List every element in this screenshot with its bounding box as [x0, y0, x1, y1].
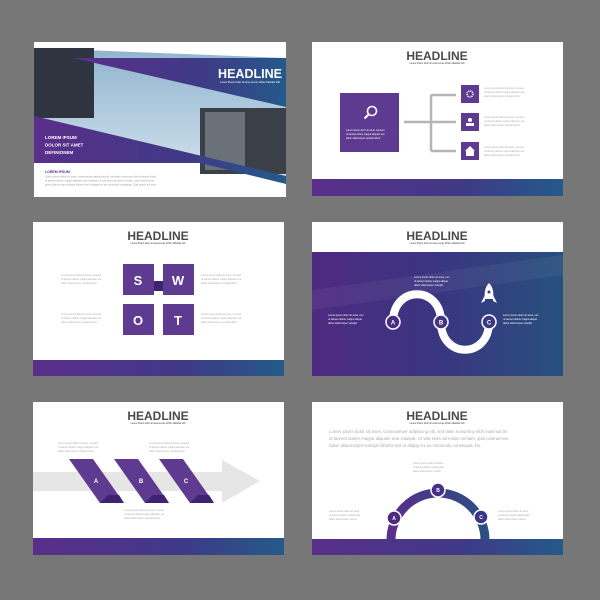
swot texts: tation ullamcorper suscipit lobort [61, 282, 97, 285]
banner: headline: HEADLINE [218, 67, 282, 81]
swot grid: O [133, 313, 143, 328]
swot texts [61, 274, 242, 324]
side texts: Lorem ipsum dolor sit amet, consect [484, 146, 524, 149]
swot texts: tation ullamcorper suscipit lobort [201, 321, 237, 324]
headline: HEADLINE [406, 409, 468, 423]
headline: HEADLINE [406, 49, 468, 63]
side texts: ut laoreet dolore magna aliquam era [484, 120, 525, 123]
body text: Lorem ipsum dolor sit amet, consectetuer adipiscing elit, sed diam nonummy nibh euismod tincid [45, 174, 156, 178]
banner: headline [73, 58, 286, 107]
paragraph: tation ullamcorper suscipit lobortis nisl ut aliquip ex ea commodo consequat. Du [329, 443, 481, 448]
slide 2: hierarchy [312, 42, 563, 196]
headline: Lorem iPsum dolor sit ama sed ac uPtion fabellas Vidi [410, 62, 465, 65]
texts: tation ullamcorper suscip [498, 518, 526, 521]
photo [34, 48, 286, 182]
side texts: ut laoreet dolore magna aliquam era [484, 150, 525, 153]
ribbons: C [184, 479, 189, 485]
slide 6: arc timeline [312, 402, 563, 555]
banner: lorem ipsum [34, 116, 286, 184]
swot texts: tation ullamcorper suscipit lobort [201, 282, 237, 285]
curve with markers: C [487, 320, 492, 326]
headline: HEADLINE [406, 229, 468, 243]
texts: Lorem ipsum dolor sit amet, consect [58, 442, 98, 445]
headline: Lorem iPsum dolor sit ama sed ac uPtion fabellas Vidi [410, 422, 465, 425]
slide 3: SWOT [33, 222, 284, 376]
texts: ut laoreet dolore magna aliq [413, 466, 445, 469]
arc [387, 483, 488, 540]
swot texts: Lorem ipsum dolor sit amet, consect [61, 313, 101, 316]
body text: tation ullamcorper suscipit lobortis nisl ut aliquip ex ea commodo consequat. Duis autem vel eum [45, 182, 156, 186]
slide 4: S-curve roadmap [312, 222, 563, 376]
paragraph: Lorem ipsum dolor sit amet, consectetuer adipiscing elit, sed diam nonummy nibh euismod tin [329, 429, 508, 434]
paragraph: ut laoreet dolore magna aliquam erat volutpat. Ut wisi enim ad minim veniam, quis nostrud exe [329, 436, 509, 441]
slide 5: ribbon arrow [33, 402, 284, 555]
texts [329, 462, 530, 521]
swot texts: Lorem ipsum dolor sit amet, consect [201, 274, 241, 277]
swot grid: S [134, 273, 143, 288]
headline: HEADLINE [127, 409, 189, 423]
paragraph [329, 429, 509, 448]
icon boxes [461, 85, 479, 160]
main box with magnifier [340, 93, 399, 152]
texts: Lorem ipsum dolor sit amet, [413, 462, 444, 465]
ribbons: A [94, 479, 99, 485]
slide 1: cover [34, 42, 286, 197]
texts: tation ullamcorper suscip [413, 470, 441, 473]
arc: B [436, 488, 440, 494]
curve with markers [386, 294, 496, 350]
side texts: tation ullamcorper suscipit lobort [484, 124, 520, 127]
curve with markers: A [391, 320, 396, 326]
texts: tation ullamcorper suscipit [414, 284, 443, 287]
banner: lorem ipsum: LOREM IPSUM [45, 135, 77, 140]
texts: tation ullamcorper suscip [329, 518, 357, 521]
swot texts: ut laoreet dolore magna aliquam era [201, 317, 242, 320]
connector [404, 95, 456, 151]
headline: Lorem iPsum dolor sit ama sed ac uPtion fabellas Vidi [131, 242, 186, 245]
banner: lorem ipsum: DEFINIONEM [45, 150, 74, 155]
headline: HEADLINE [127, 229, 189, 243]
swot texts: Lorem ipsum dolor sit amet, consect [201, 313, 241, 316]
texts: Lorem ipsum dolor sit amet, consect [124, 509, 164, 512]
swot texts: Lorem ipsum dolor sit amet, consect [61, 274, 101, 277]
swot texts: tation ullamcorper suscipit lobort [61, 321, 97, 324]
curve with markers: B [439, 320, 444, 326]
swot texts: ut laoreet dolore magna aliquam era [61, 317, 102, 320]
ribbons: B [139, 479, 144, 485]
headline: Lorem iPsum dolor sit ama sed ac uPtion fabellas Vidi [410, 242, 465, 245]
texts: tation ullamcorper suscipit lobort [124, 517, 160, 520]
body text: LOREM IPSUM [45, 170, 70, 174]
side texts: Lorem ipsum dolor sit amet, consect [484, 116, 524, 119]
main box with magnifier: Lorem ipsum dolor sit amet, consect [346, 129, 385, 132]
texts: ut laoreet dolore magna aliquam era [149, 446, 190, 449]
banner: headline: Lorem iPsum dolor sit ama sed ac uPtion fabellas Vidi [220, 81, 280, 84]
texts: ut laoreet dolore magna aliquam era [124, 513, 165, 516]
icon: rocket [481, 283, 497, 303]
side texts [484, 87, 525, 157]
texts: ut laoreet dolore magna aliqua [503, 318, 537, 321]
texts: ut laoreet dolore magna aliqua [414, 280, 448, 283]
texts: tation ullamcorper suscipit [503, 322, 532, 325]
texts: tation ullamcorper suscipit lobort [58, 450, 94, 453]
texts: Lorem ipsum dolor sit amet, consect [149, 442, 189, 445]
texts: Lorem ipsum dolor sit amet, con [328, 314, 364, 317]
arc: C [479, 515, 483, 521]
side texts: tation ullamcorper suscipit lobort [484, 154, 520, 157]
headline: Lorem iPsum dolor sit ama sed ac uPtion fabellas Vidi [131, 422, 186, 425]
texts: ut laoreet dolore magna aliq [498, 514, 530, 517]
texts: Lorem ipsum dolor sit amet, con [414, 276, 450, 279]
texts: ut laoreet dolore magna aliqua [328, 318, 362, 321]
texts: ut laoreet dolore magna aliquam era [58, 446, 99, 449]
main box with magnifier: ut laoreet dolore magna aliquam era [346, 133, 385, 136]
side texts: tation ullamcorper suscipit lobort [484, 95, 520, 98]
body text: ut laoreet dolore magna aliquam erat volutpat. Ut wisi enim ad minim veniam, quis nostrud exer [45, 178, 154, 182]
texts: Lorem ipsum dolor sit amet, con [503, 314, 539, 317]
texts: Lorem ipsum dolor sit amet, [329, 510, 360, 513]
ribbons [69, 459, 214, 503]
swot grid: W [172, 273, 185, 288]
texts: tation ullamcorper suscipit lobort [149, 450, 185, 453]
main box with magnifier: tation ullamcorper suscipit lobort [346, 137, 381, 140]
swot texts: ut laoreet dolore magna aliquam era [201, 278, 242, 281]
texts [328, 276, 539, 325]
arc: A [392, 516, 396, 522]
swot grid: T [174, 313, 182, 328]
texts: Lorem ipsum dolor sit amet, [498, 510, 529, 513]
swot grid [123, 264, 194, 335]
texts: tation ullamcorper suscipit [328, 322, 357, 325]
texts: ut laoreet dolore magna aliq [329, 514, 361, 517]
side texts: Lorem ipsum dolor sit amet, consect [484, 87, 524, 90]
body text [45, 170, 156, 186]
banner: lorem ipsum: DOLOR SIT AMET [45, 142, 84, 148]
side texts: ut laoreet dolore magna aliquam era [484, 91, 525, 94]
arrow [33, 460, 260, 503]
texts [58, 442, 190, 520]
swot texts: ut laoreet dolore magna aliquam era [61, 278, 102, 281]
